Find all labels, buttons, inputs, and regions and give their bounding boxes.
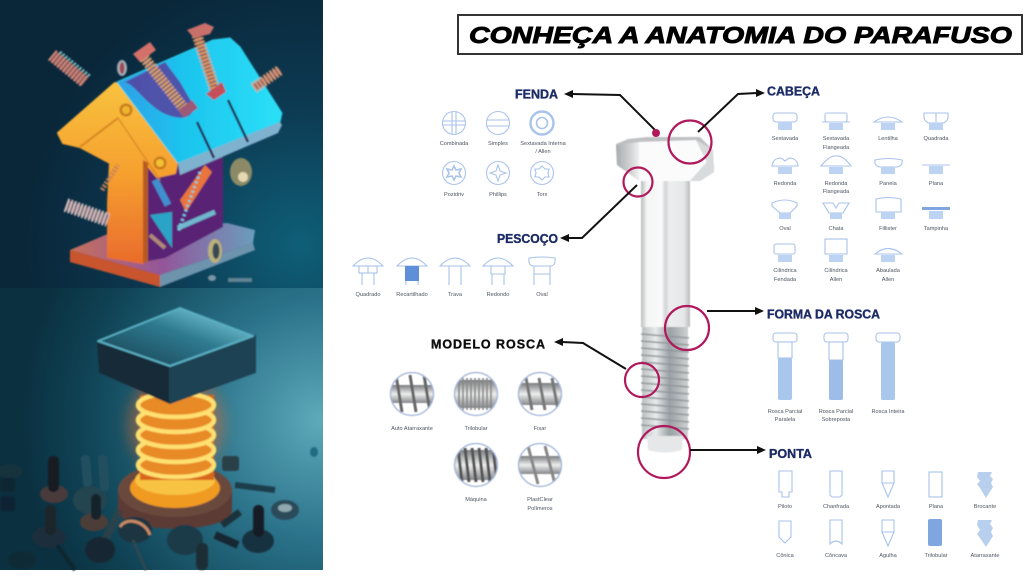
labels: cabeca: Panela (879, 181, 898, 187)
icon: plana (929, 472, 942, 497)
callout: ponta arrow (638, 426, 766, 478)
labels: cabeca: Fillister (879, 226, 897, 232)
labels: cabeca: Redonda (825, 181, 848, 187)
icon: redonda (772, 158, 798, 174)
icon: plastclear polimeros (518, 444, 563, 486)
labels: cabeca: Fendada (774, 277, 797, 283)
labels: forma da rosca: Rosca Inteira (872, 409, 905, 415)
callout: modelo rosca arrow (554, 338, 659, 397)
labels: cabeca: Abaulada (876, 268, 901, 274)
icon: atarraxante (977, 520, 993, 547)
heading: pescoco: PESCOÇO (497, 232, 558, 246)
labels: forma da rosca: Sobreposta (822, 417, 851, 423)
icon: oval (772, 200, 797, 219)
square screw head (98, 308, 255, 403)
icon: maquina (454, 444, 499, 486)
labels: forma da rosca: Paralela (775, 417, 796, 423)
labels: forma da rosca: Rosca Parcial (768, 409, 802, 415)
washers (208, 158, 252, 282)
labels: fenda: Phillips (489, 192, 507, 198)
labels: pescoco: Quadrado (356, 292, 380, 298)
labels: cabeca: Cilíndrica (824, 268, 849, 274)
icon: cilindrica fendada (774, 244, 795, 262)
bolt threads (641, 327, 689, 452)
icon: trilobular (928, 519, 942, 546)
icon: fixar (518, 372, 563, 416)
labels: cabeca: Redonda (774, 181, 797, 187)
icon: sextavada interna (530, 112, 554, 134)
labels: fenda: Sextavada Interna (520, 141, 567, 147)
illustration: metal house built with screws (0, 0, 323, 288)
heading: forma da rosca: FORMA DA ROSCA (767, 308, 880, 322)
scattered small screws (0, 447, 318, 570)
icon: sextavada (773, 113, 797, 130)
icon: plana (922, 165, 950, 174)
bolt shaft (641, 178, 690, 327)
labels: cabeca: Sextavada (823, 136, 850, 142)
labels: modelo rosca: Trilobular (464, 426, 488, 432)
callout: forma da rosca arrow (665, 306, 764, 350)
icon: chanfrada (830, 471, 842, 497)
labels: modelo rosca: Auto Atarraxante (391, 426, 433, 432)
labels: ponta: Cônica (776, 553, 795, 559)
purple back wall with tangled screws (143, 155, 223, 262)
icon: concava (830, 520, 842, 544)
callout: pescoco arrow (560, 168, 652, 242)
icon: lentilha (874, 117, 902, 130)
labels: modelo rosca: Fixar (534, 426, 546, 432)
heading: fenda: FENDA (515, 88, 558, 102)
labels: pescoco: Redondo (487, 292, 509, 298)
labels: cabeca: Cilíndrica (773, 268, 798, 274)
icon: filister (876, 198, 901, 219)
labels: cabeca: Tampinha (924, 226, 949, 232)
icon: abaulada allen (875, 248, 902, 262)
heading: ponta: PONTA (769, 447, 812, 461)
labels: cabeca: Lentilha (878, 136, 899, 142)
icon: brocante (977, 472, 993, 498)
glowing thread (138, 393, 214, 480)
labels: ponta: Trilobular (924, 553, 948, 559)
icon: agulha (882, 520, 894, 546)
labels: cabeca: Sextavada (772, 136, 799, 142)
title box: CONHEÇA A ANATOMIA DO PARAFUSO (469, 22, 1012, 48)
labels: cabeca (772, 136, 949, 283)
icon: rosca parcial paralela (773, 333, 797, 400)
labels: fenda: Torx (537, 192, 547, 198)
glow (128, 373, 224, 477)
panel: cabeca head types (772, 113, 950, 283)
labels: ponta (776, 504, 999, 559)
icon: quadrado (353, 258, 383, 285)
icon: sextavada flangeada (822, 113, 850, 130)
flying screws (52, 23, 280, 220)
icon: conica (779, 521, 791, 543)
icon: auto atarraxante (390, 372, 434, 416)
icon: piloto (779, 471, 792, 497)
panel: fenda drive types (440, 112, 567, 198)
icon: panela (875, 158, 902, 174)
icon: chata (823, 203, 849, 219)
labels: fenda: Simples (488, 141, 508, 147)
icon: trava (440, 258, 470, 285)
icon: apontada (882, 471, 894, 497)
labels: modelo rosca: PlastClear (527, 497, 553, 503)
labels: cabeca: Chata (829, 226, 844, 232)
labels: modelo rosca: Máquina (465, 497, 488, 503)
callout: fenda arrow (564, 90, 660, 137)
labels: pescoco (356, 292, 548, 298)
icon: phillips (486, 162, 510, 184)
icon: redonda flangeada (821, 156, 851, 174)
labels: ponta: Plana (929, 504, 944, 510)
heading: modelo rosca: MODELO ROSCA (431, 338, 545, 352)
labels: forma da rosca (768, 409, 905, 423)
labels: cabeca: Plana (929, 181, 944, 187)
labels: pescoco: Recartilhado (396, 292, 428, 298)
panel: modelo rosca thread models (390, 372, 563, 486)
icon: pozidriv (442, 162, 466, 184)
orange roof and pillar (58, 83, 177, 263)
labels: cabeca: Oval (779, 226, 791, 232)
bolt hex head (616, 137, 714, 181)
panel: forma da rosca (768, 333, 905, 423)
labels: ponta: Apontada (876, 504, 901, 510)
icon: rosca parcial sobreposta (824, 333, 848, 400)
icon: recartilhado (397, 258, 427, 285)
labels: ponta: Côncava (825, 553, 848, 559)
title box (458, 15, 1022, 54)
rivets (120, 104, 166, 170)
labels: fenda (440, 141, 567, 198)
labels: modelo rosca: Polímeros (527, 506, 553, 512)
icon: trilobular (454, 372, 499, 416)
labels: forma da rosca: Rosca Parcial (819, 409, 853, 415)
labels: cabeca: Allen (882, 277, 894, 283)
labels: fenda: Combinada (440, 141, 469, 147)
icon: combinada (442, 112, 466, 134)
panel: pescoco neck types (353, 257, 555, 298)
cyan roof (117, 38, 282, 175)
base plate (70, 223, 255, 287)
central bolt diagram (616, 137, 714, 452)
icon: torx (530, 162, 554, 184)
icon: quadrada (924, 113, 948, 130)
labels: cabeca: Flangeada (823, 145, 850, 151)
panel: ponta tip types (776, 471, 999, 559)
labels: ponta: Brocante (974, 504, 996, 510)
labels: cabeca: Flangeada (823, 189, 850, 195)
labels: ponta: Atarraxante (971, 553, 999, 559)
heading: cabeca: CABEÇA (767, 84, 820, 98)
labels: pescoco: Oval (536, 292, 548, 298)
callout: cabeca arrow (668, 89, 765, 164)
labels: cabeca: Quadrada (924, 136, 949, 142)
labels: ponta: Agulha (879, 553, 898, 559)
icon: rosca inteira (876, 333, 900, 400)
icon: cilindrica allen (825, 239, 847, 262)
labels: fenda: / Allen (535, 149, 551, 155)
washer base (118, 463, 232, 529)
labels: ponta: Chanfrada (823, 504, 850, 510)
labels: ponta: Piloto (778, 504, 792, 510)
icon: redondo (483, 258, 513, 285)
icon: simples (486, 112, 510, 134)
icon: oval (529, 257, 555, 285)
icon: tampinha (922, 207, 950, 219)
labels: cabeca: Allen (830, 277, 842, 283)
labels: fenda: Pozidriv (444, 192, 464, 198)
labels: modelo rosca (391, 426, 553, 512)
labels: pescoco: Trava (448, 292, 463, 298)
